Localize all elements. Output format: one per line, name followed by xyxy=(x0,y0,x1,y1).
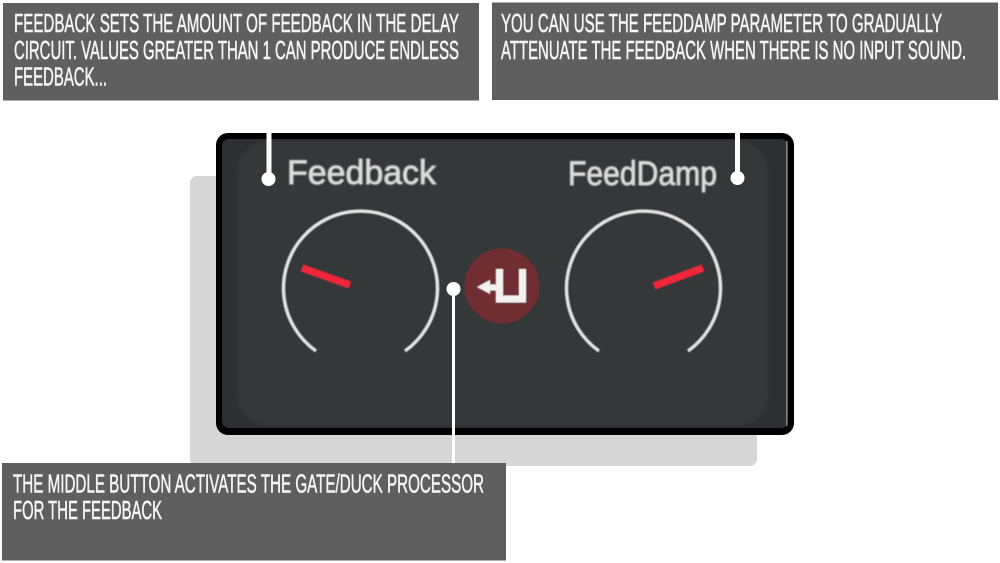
callout: middle button xyxy=(2,463,506,560)
callout: middle button: FOR THE FEEDBACK xyxy=(13,495,162,525)
callout: middle button: THE MIDDLE BUTTON ACTIVATES THE GATE/DUCK PROCESSOR xyxy=(13,468,484,498)
callout: FeedDamp xyxy=(492,2,998,100)
callout pointer: Feedback xyxy=(262,132,276,186)
knob: Feedback xyxy=(284,211,438,351)
callout: Feedback: FEEDBACK... xyxy=(14,62,107,92)
knob: FeedDamp xyxy=(566,211,720,351)
callout: Feedback: FEEDBACK SETS THE AMOUNT OF FEEDBACK IN THE DELAY xyxy=(14,8,459,38)
button: gate/duck processor xyxy=(464,248,540,324)
callout: Feedback xyxy=(3,3,479,100)
callout: Feedback: CIRCUIT. VALUES GREATER THAN 1 CAN PRODUCE ENDLESS xyxy=(14,35,459,65)
label: FeedDamp: FeedDamp xyxy=(568,155,717,193)
panel shadow xyxy=(190,176,757,466)
callout pointer: middle button xyxy=(446,282,460,464)
plugin panel xyxy=(216,133,794,435)
label: Feedback: Feedback xyxy=(287,154,437,192)
callout pointer: FeedDamp xyxy=(730,128,744,185)
